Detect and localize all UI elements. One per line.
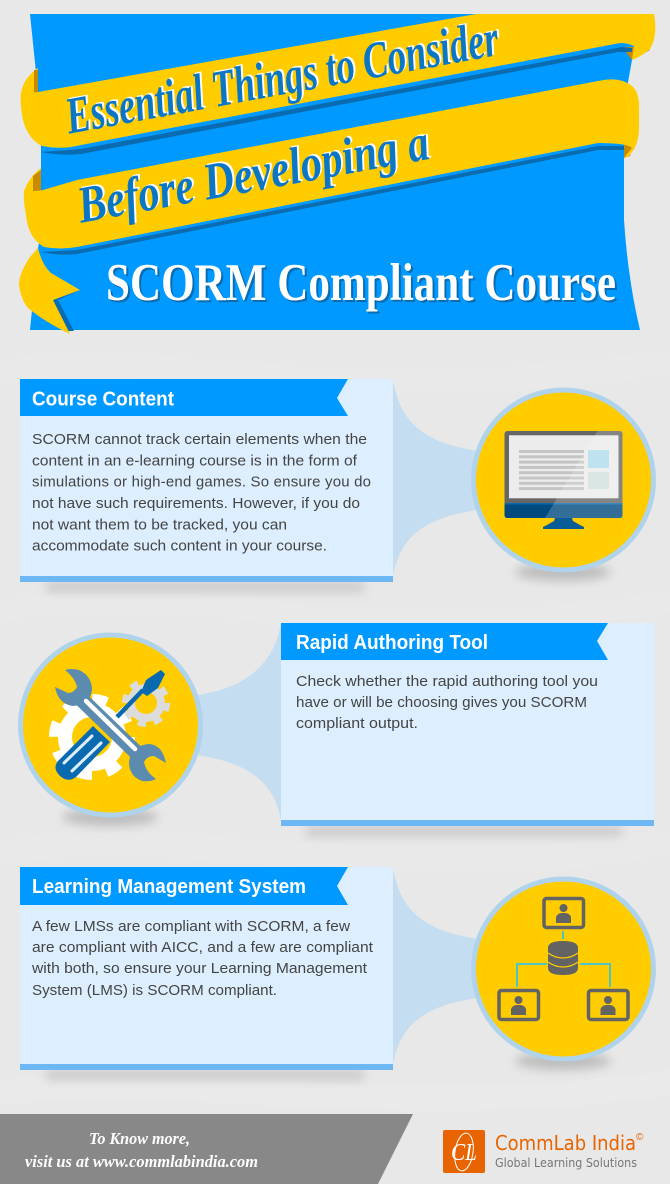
body text: simulations or high-end games. So ensure you do xyxy=(32,474,371,491)
body text: are compliant with AICC, and a few are compliant xyxy=(32,939,374,956)
panel shadow xyxy=(306,826,622,836)
panel body xyxy=(20,379,393,582)
body text: content in an e-learning course is in the form of xyxy=(32,452,358,469)
body text: not have such requirements. However, if you do xyxy=(32,495,360,512)
copyright mark: © xyxy=(636,1132,644,1143)
body text: SCORM cannot track certain elements when the xyxy=(32,431,367,448)
logo name: CommLab India xyxy=(495,1131,636,1155)
ribbon one xyxy=(21,14,655,155)
body text: accommodate such content in your course. xyxy=(32,538,327,554)
title line two: Before Developing a xyxy=(72,114,433,235)
circle icon: tools xyxy=(20,635,200,826)
body text: not want them to be tracked, you can xyxy=(32,516,287,533)
body text: with both, so ensure your Learning Management xyxy=(31,960,368,977)
heading: Rapid Authoring Tool xyxy=(296,632,488,654)
heading: Learning Management System xyxy=(32,876,306,898)
footer text: To Know more, xyxy=(89,1129,190,1148)
footer band xyxy=(0,1114,413,1184)
logo tagline: Global Learning Solutions xyxy=(495,1156,637,1170)
panel: learning management system xyxy=(20,867,478,1080)
panel body xyxy=(281,623,654,826)
logo: CommLab India xyxy=(443,1130,644,1173)
icon: top screen xyxy=(544,898,584,928)
connector xyxy=(393,868,478,1064)
icon: grey gear xyxy=(125,682,167,724)
panel bottom stripe xyxy=(20,1064,393,1070)
title banner xyxy=(19,9,655,334)
connector xyxy=(393,380,478,576)
panel shadow xyxy=(46,1070,364,1080)
body text: compliant output. xyxy=(296,715,418,732)
circle icon: network xyxy=(474,879,654,1070)
panel body xyxy=(20,867,393,1070)
body text xyxy=(32,431,371,554)
title line one xyxy=(60,9,506,146)
panel bottom stripe xyxy=(20,576,393,582)
icon: connecting lines xyxy=(517,931,610,987)
heading tab xyxy=(20,379,348,416)
icon: monitor xyxy=(504,431,622,529)
body text: A few LMSs are compliant with SCORM, a few xyxy=(32,918,350,935)
body text xyxy=(31,918,374,999)
body text: Check whether the rapid authoring tool you xyxy=(296,673,598,690)
heading: Course Content xyxy=(32,388,174,410)
heading tab xyxy=(20,867,348,905)
blue flag xyxy=(30,14,654,330)
logo mark xyxy=(443,1130,485,1173)
footer text xyxy=(25,1129,258,1171)
logo mark: CL xyxy=(451,1140,477,1166)
body text: have or will be choosing gives you SCORM xyxy=(296,694,587,711)
panel bottom stripe xyxy=(281,820,654,826)
panel shadow xyxy=(46,582,364,592)
panel: rapid authoring tool xyxy=(196,623,654,836)
icon: left screen xyxy=(499,990,538,1020)
heading tab xyxy=(281,623,608,660)
icon: screwdriver xyxy=(55,670,165,780)
body text xyxy=(296,673,598,732)
circle icon: monitor xyxy=(474,390,654,581)
panel: course content xyxy=(20,379,478,592)
icon: white gear xyxy=(54,699,130,775)
icon: database xyxy=(548,941,578,975)
ribbon tail xyxy=(19,248,80,334)
icon: right screen xyxy=(588,990,628,1020)
body text: System (LMS) is SCORM compliant. xyxy=(32,982,277,999)
title line two: Before Developing a xyxy=(74,113,435,233)
connector xyxy=(196,623,281,820)
icon: wrench xyxy=(55,669,166,781)
footer text: visit us at www.commlabindia.com xyxy=(25,1152,258,1171)
ribbon two xyxy=(24,79,639,255)
